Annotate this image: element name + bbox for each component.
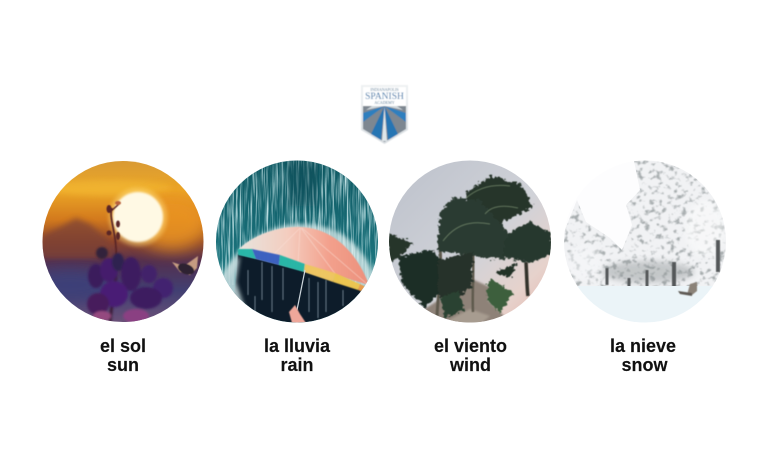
logo text: SPANISH [365,92,404,102]
label: el sol / sun: el sol [100,336,146,356]
umbrella rim [238,249,366,292]
umbrella ribs [289,228,366,284]
label: el viento / wind [434,336,507,375]
logo text [365,87,404,105]
logo text: ACADEMY [374,100,395,105]
palm highlights [443,185,518,241]
tree trunks [607,240,718,287]
palm trunks [437,245,528,316]
label: el sol / sun: sun [107,355,139,375]
snow ground [578,286,712,322]
umbrella handle and hand [297,270,305,310]
logo text: INDIANAPOLIS [370,87,399,92]
label: la nieve / snow: la nieve [610,336,676,356]
palm fronds [388,176,552,318]
photo: rain [214,160,380,323]
label: la lluvia / rain: la lluvia [264,336,331,356]
thatched roof [424,279,504,322]
flower stem [106,201,121,262]
photo: wind [388,160,552,326]
bee [172,256,198,277]
flower cluster [87,247,173,323]
label: la lluvia / rain: rain [280,355,314,375]
bench [678,282,697,296]
label: la lluvia / rain [264,336,331,375]
photo: sun [42,161,204,322]
photo: snow [560,155,732,324]
label: la nieve / snow [610,336,676,375]
label: el viento / wind: wind [449,355,491,375]
darker lower treeline [602,261,694,283]
label: la nieve / snow: snow [621,355,668,375]
logo: Spanish academy shield [361,85,408,144]
rain spray [216,224,380,296]
dark interior under umbrella [232,254,370,323]
label: el viento / wind: el viento [434,336,507,356]
umbrella canopy [238,227,369,285]
water drops [248,262,343,322]
label: el sol / sun [100,336,146,375]
